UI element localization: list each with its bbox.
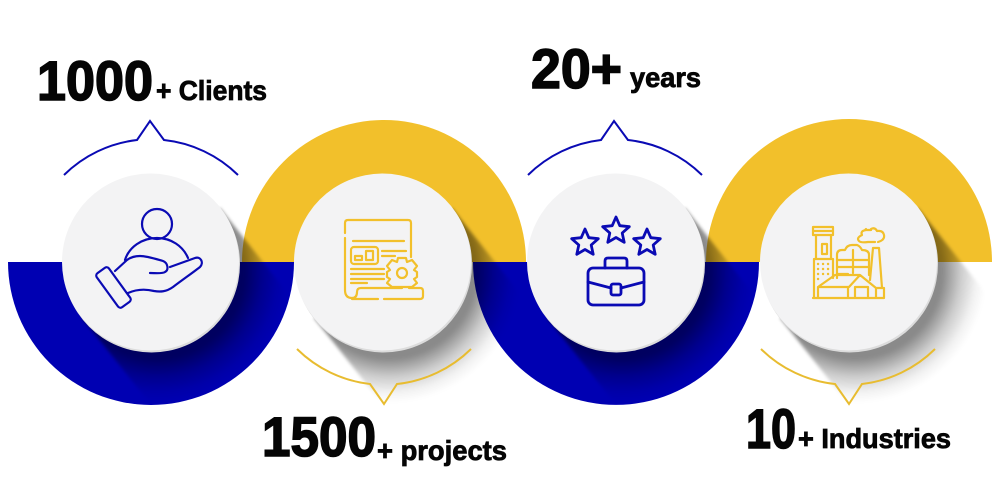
label: 20+ years: 20+ bbox=[531, 37, 622, 100]
label: 20+ years: years bbox=[630, 62, 701, 93]
label: 10+ Industries: + Industries bbox=[798, 423, 951, 454]
callout bracket 4 bbox=[761, 349, 935, 404]
disc 2 bbox=[294, 174, 472, 352]
label: 10+ Industries: 10 bbox=[746, 397, 796, 460]
gold half ring 4 bbox=[706, 119, 992, 262]
callout bracket 3 bbox=[528, 121, 702, 175]
disc shadows bbox=[82, 208, 993, 421]
callout bracket 1 bbox=[64, 121, 238, 175]
label: 1000+ Clients: + Clients bbox=[156, 75, 267, 106]
callout bracket 2 bbox=[297, 349, 471, 404]
blue half ring 1 bbox=[8, 262, 294, 405]
icon: hand holding client bbox=[95, 209, 202, 309]
blue half ring 3 bbox=[473, 262, 759, 405]
label: 10+ Industries bbox=[746, 397, 951, 460]
gold half ring 2 bbox=[242, 120, 526, 262]
label: 1500+ projects: 1500 bbox=[262, 405, 376, 468]
icon: stars and briefcase bbox=[572, 217, 660, 305]
label: 1500+ projects bbox=[262, 405, 507, 468]
disc 1 bbox=[62, 174, 240, 352]
label: 1000+ Clients: 1000 bbox=[37, 49, 153, 112]
label: 1500+ projects: + projects bbox=[377, 435, 507, 466]
label: 1000+ Clients bbox=[37, 49, 267, 112]
disc 4 bbox=[760, 174, 938, 352]
icon: project document with gear bbox=[345, 220, 423, 299]
label: 20+ years bbox=[531, 37, 701, 100]
disc 3 bbox=[527, 174, 705, 352]
icon: factory bbox=[813, 227, 884, 298]
